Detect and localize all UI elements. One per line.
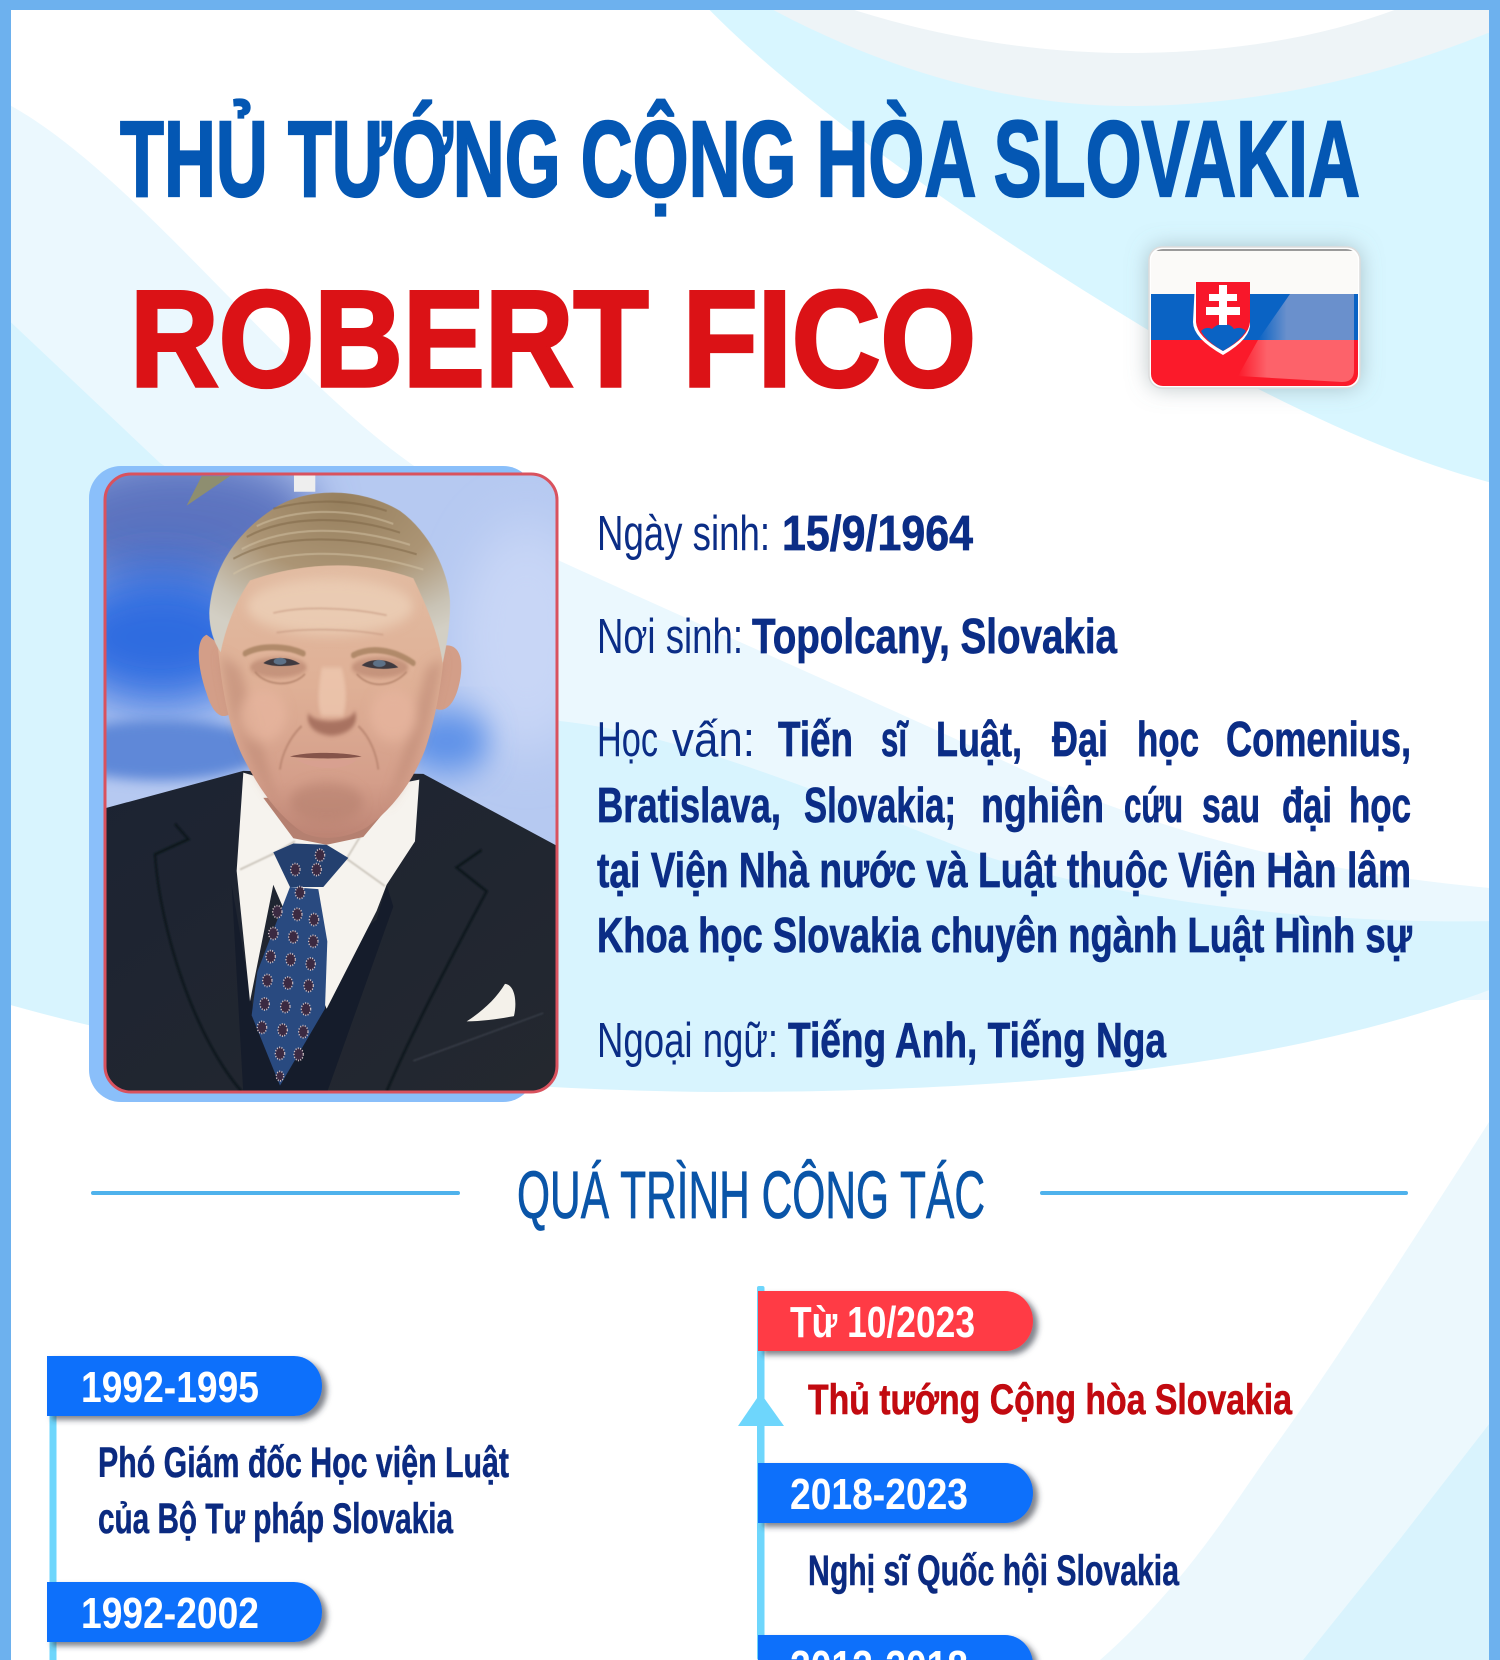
info: education: đại <box>1282 779 1332 833</box>
pocket square <box>467 984 515 1021</box>
smile folds <box>280 726 378 770</box>
portrait photo frame <box>89 466 535 1102</box>
timeline right axis with arrow <box>738 1286 784 1660</box>
info: place of birth: Nơi sinh: <box>597 610 743 664</box>
info: date of birth: Ngày sinh: <box>597 507 770 561</box>
section heading: career: QUÁ TRÌNH CÔNG TÁC <box>517 1158 985 1233</box>
face <box>215 561 447 838</box>
info: languages: Ngoại ngữ: <box>597 1014 778 1068</box>
info: education: Học <box>597 713 658 767</box>
info: languages: Tiếng Anh, Tiếng Nga <box>788 1014 1167 1068</box>
eye bags <box>255 672 407 684</box>
icon: Slovakia flag <box>1149 247 1360 388</box>
forehead lines <box>273 608 387 635</box>
timeline entry 1992-1995: Phó Giám đốc Học viện Luật <box>98 1439 509 1487</box>
eyebrows <box>245 647 413 663</box>
jacket lapels <box>155 824 487 1094</box>
name heading: ROBERT FICO <box>130 263 976 416</box>
timeline left axis <box>50 1400 56 1660</box>
hair texture <box>233 502 423 574</box>
info: place of birth: Topolcany, Slovakia <box>752 610 1118 664</box>
nose <box>308 711 356 736</box>
timeline entry 1992-1995: của Bộ Tư pháp Slovakia <box>98 1495 454 1543</box>
flag shield <box>1193 282 1250 355</box>
info: education <box>597 713 1412 963</box>
info: languages <box>597 1014 1167 1068</box>
portrait photo of Robert Fico <box>106 476 556 1090</box>
info: date of birth <box>597 507 973 561</box>
info: education: sĩ <box>881 713 909 767</box>
info: education: Bratislava, <box>597 779 781 833</box>
face shading <box>220 578 443 822</box>
info: education: cứu <box>1124 779 1183 833</box>
info: education: Luật, <box>936 713 1022 767</box>
timeline entry from 10/2023 <box>758 1291 1293 1424</box>
mouth <box>290 752 362 758</box>
info: education: Tiến <box>778 713 853 767</box>
info: education: nghiên <box>981 779 1104 833</box>
info: education: học <box>1349 779 1411 833</box>
ears <box>198 634 228 716</box>
info: education: Slovakia; <box>804 779 956 833</box>
tie <box>252 843 348 1086</box>
pocket line <box>413 1013 543 1061</box>
timeline entry from 10/2023: Từ 10/2023 <box>790 1298 975 1347</box>
photo background <box>106 476 556 1085</box>
eyes <box>263 658 398 669</box>
suit jacket <box>103 771 558 1098</box>
shirt collar shadow <box>240 837 385 886</box>
info: education: học <box>1137 713 1199 767</box>
info: education: Comenius, <box>1226 713 1411 767</box>
portrait border <box>105 474 557 1092</box>
timeline entry 2018-2023: 2018-2023 <box>790 1470 968 1519</box>
eye sockets <box>250 657 408 678</box>
section heading: career <box>91 1158 1408 1233</box>
info: date of birth: 15/9/1964 <box>782 507 973 561</box>
info: education: Đại <box>1052 713 1108 767</box>
info: education: sau <box>1202 779 1260 833</box>
timeline entry 2012-2018 <box>758 1635 1033 1660</box>
timeline entry 1992-1995 <box>47 1356 509 1543</box>
hair <box>209 493 450 663</box>
waistcoat <box>232 885 393 1094</box>
timeline entry 1992-2002: 1992-2002 <box>81 1589 259 1638</box>
timeline entry 1992-1995: 1992-1995 <box>81 1363 259 1412</box>
info: place of birth <box>597 610 1118 664</box>
info: education: vấn: <box>672 713 755 767</box>
timeline entry 2018-2023 <box>758 1463 1180 1595</box>
timeline entry 1992-2002 <box>47 1582 322 1642</box>
timeline entry from 10/2023: Thủ tướng Cộng hòa Slovakia <box>808 1376 1293 1424</box>
neck <box>263 798 382 845</box>
shirt <box>237 773 419 1009</box>
timeline entry 2018-2023: Nghị sĩ Quốc hội Slovakia <box>808 1547 1180 1595</box>
